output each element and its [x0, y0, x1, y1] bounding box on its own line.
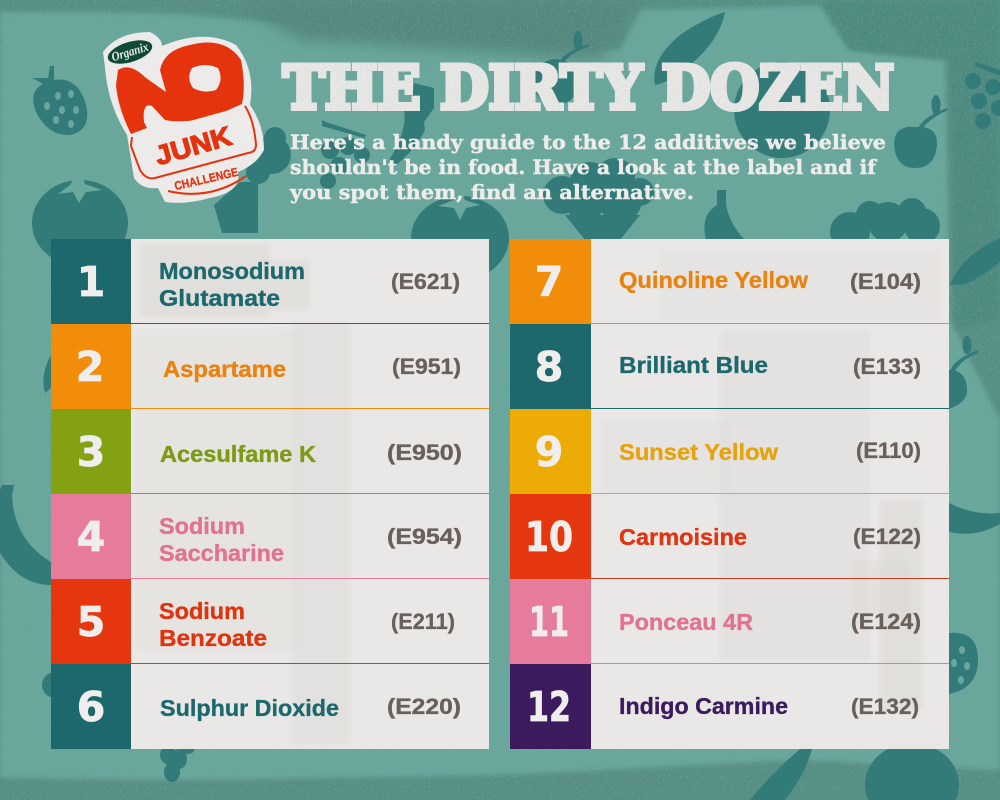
- icon: strawberry: [949, 633, 978, 694]
- intro text: [289, 130, 886, 204]
- intro text: shouldn't be in food. Have a look at the label and if: [290, 155, 877, 179]
- row 11: (E124): [851, 609, 921, 634]
- row 5: Sodium: [159, 598, 245, 624]
- icon: apple: [945, 336, 978, 410]
- row 1: [51, 239, 489, 324]
- challenge wordmark: CHALLENGE: [173, 165, 239, 193]
- row 10: [510, 494, 949, 579]
- row 10: (E122): [853, 524, 921, 549]
- panel: right list: [510, 239, 949, 749]
- icon: grapes: [965, 62, 1000, 129]
- icon: strawberry: [32, 66, 87, 135]
- row 9: 9: [535, 428, 563, 476]
- row 11: [510, 579, 949, 664]
- intro text: Here's a handy guide to the 12 additives we believe: [290, 130, 886, 154]
- row 3: Acesulfame K: [160, 441, 316, 467]
- row 3: [51, 409, 489, 494]
- row 7: (E104): [850, 269, 921, 294]
- icon: tomato: [865, 743, 959, 800]
- row 7: 7: [535, 258, 563, 306]
- row 12: (E132): [851, 694, 919, 719]
- row 8: 8: [535, 343, 563, 391]
- row 2: 2: [76, 343, 104, 391]
- row 1: (E621): [391, 269, 460, 294]
- icon: banana: [949, 503, 1000, 534]
- icon: banana: [0, 485, 51, 585]
- row 4: Saccharine: [159, 540, 284, 566]
- red NO lettering: [116, 43, 244, 134]
- row 5: Benzoate: [159, 625, 267, 651]
- icon: grapes: [320, 120, 370, 189]
- row 4: (E954): [387, 524, 462, 549]
- logo: No Junk Challenge: [103, 32, 264, 203]
- row 6: 6: [77, 683, 105, 731]
- row 1: Monosodium: [159, 258, 305, 284]
- icon: pea pod: [750, 749, 812, 800]
- row 5: [51, 579, 489, 664]
- row 9: (E110): [856, 438, 921, 463]
- row 7: Quinoline Yellow: [619, 267, 808, 293]
- row 9: [510, 409, 949, 494]
- icon: pea pod: [654, 12, 725, 85]
- row 6: Sulphur Dioxide: [160, 695, 339, 721]
- icon: cauliflower: [830, 198, 940, 252]
- row 8: Brilliant Blue: [619, 352, 768, 378]
- row 9: Sunset Yellow: [619, 439, 778, 465]
- row 11: 11: [529, 598, 569, 646]
- title: THE DIRTY DOZEN: [283, 54, 894, 124]
- row 6: [51, 664, 461, 749]
- row 12: Indigo Carmine: [619, 693, 788, 719]
- row 6: (E220): [387, 694, 461, 719]
- row 10: Carmoisine: [619, 524, 747, 550]
- row 5: 5: [77, 598, 105, 646]
- icon: tomato: [32, 168, 128, 266]
- organix badge: Organix: [109, 39, 151, 64]
- row 5: (E211): [391, 609, 455, 634]
- row 2: Aspartame: [163, 356, 286, 382]
- panel: left list: [51, 239, 489, 749]
- icon: grapes: [160, 742, 195, 782]
- row 4: [51, 494, 489, 579]
- row 1: Glutamate: [159, 285, 280, 311]
- intro text: you spot them, find an alternative.: [289, 180, 694, 204]
- row 3: (E950): [387, 440, 462, 465]
- row 8: (E133): [853, 354, 921, 379]
- icon: round fruit: [42, 672, 68, 698]
- row 2: [51, 324, 489, 409]
- icon: large apple: [734, 62, 830, 158]
- row 3: 3: [77, 428, 105, 476]
- icon: broccoli: [214, 127, 291, 233]
- row 2: (E951): [392, 354, 461, 379]
- row 7: [510, 239, 949, 324]
- row 4: 4: [77, 513, 105, 561]
- icon: small apple: [894, 95, 948, 168]
- row 11: Ponceau 4R: [619, 609, 753, 635]
- icon: apple behind title: [533, 31, 590, 105]
- junk wordmark: JUNK: [152, 121, 235, 171]
- row 12: 12: [527, 683, 571, 731]
- icon: leaf: [43, 355, 51, 393]
- junk box: [131, 106, 256, 178]
- icon: pea pod: [950, 238, 1000, 285]
- icon: banana: [704, 190, 745, 240]
- icon: banana: [388, 83, 434, 166]
- row 4: Sodium: [159, 513, 245, 539]
- row 10: 10: [525, 513, 573, 561]
- icon: broccoli: [543, 158, 654, 240]
- icon: tomato: [411, 188, 509, 280]
- row 1: 1: [77, 258, 105, 306]
- row 8: [510, 324, 949, 409]
- row 12: [510, 664, 919, 749]
